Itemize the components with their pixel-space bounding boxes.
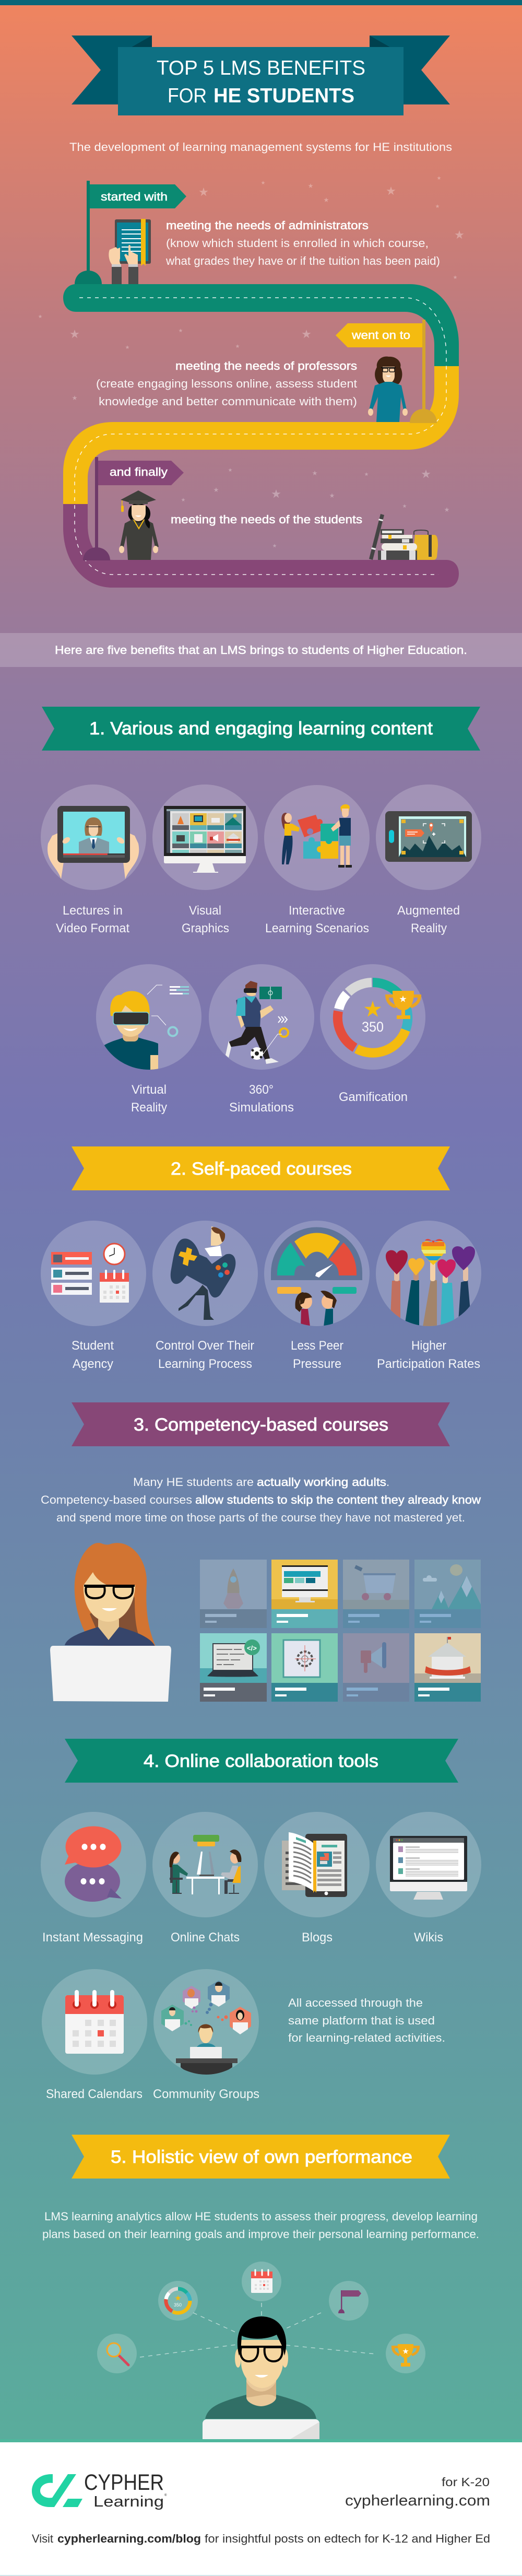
label: Pressure bbox=[293, 1357, 341, 1371]
panel: interactive learning scenarios bbox=[264, 785, 370, 935]
decorative stars bbox=[38, 176, 464, 547]
text: professors bbox=[96, 359, 357, 408]
logo mark bbox=[32, 2474, 82, 2507]
label: Wikis bbox=[414, 1930, 443, 1945]
panel: student agency bbox=[41, 1221, 146, 1371]
section 3 ribbon bbox=[72, 1402, 450, 1446]
illustration: student with glasses at laptop bbox=[203, 2316, 319, 2439]
label: Shared Calendars bbox=[46, 2087, 143, 2101]
footer blog link: cypherlearning.com/blog bbox=[57, 2532, 201, 2545]
tile: code laptop bbox=[200, 1633, 267, 1702]
flag: and finally bbox=[83, 457, 184, 560]
label: Augmented bbox=[397, 904, 460, 918]
section 4 ribbon: 4. Online collaboration tools bbox=[144, 1751, 378, 1771]
text: all accessed: All accessed through the bbox=[288, 1996, 423, 2009]
label: Student bbox=[72, 1339, 114, 1353]
panel: online chats bbox=[152, 1812, 258, 1945]
title text: TOP 5 LMS BENEFITS bbox=[157, 57, 365, 79]
title ribbon bbox=[72, 36, 450, 115]
logo wordmark bbox=[84, 2470, 167, 2510]
label: Virtual bbox=[132, 1083, 167, 1097]
subtitle: The development of learning management systems for HE institutions bbox=[69, 140, 452, 154]
text: all accessed: same platform that is used bbox=[288, 2014, 435, 2027]
tile: rocket bbox=[200, 1560, 267, 1628]
label: Visual bbox=[189, 904, 221, 918]
panel: blogs bbox=[264, 1812, 370, 1945]
icon: mini trophy bbox=[386, 2334, 425, 2373]
section 2 ribbon: 2. Self-paced courses bbox=[171, 1159, 352, 1179]
panel: visual graphics bbox=[152, 784, 258, 935]
tile: monitor bbox=[271, 1560, 338, 1628]
icon: cards, clock, calendar bbox=[51, 1244, 129, 1303]
road: green, yellow and purple segments bbox=[63, 284, 459, 588]
text: professors: (create engaging lessons online, assess student bbox=[96, 377, 357, 390]
footer strip bbox=[0, 2439, 522, 2442]
icon: VR headset person bbox=[103, 985, 189, 1070]
icon: gauge bbox=[271, 1227, 362, 1280]
label: Video Format bbox=[56, 921, 129, 935]
icon: tablet with hands bbox=[109, 219, 151, 284]
flag: started with bbox=[75, 181, 186, 284]
text: competency-based paragraph: . bbox=[386, 1476, 389, 1489]
panel: lectures in video format bbox=[41, 784, 146, 935]
label: Blogs bbox=[302, 1930, 333, 1945]
text: competency-based paragraph: allow students to skip the content they already know bbox=[195, 1493, 481, 1506]
text: analytics paragraph: LMS learning analytics allow HE students to assess their progress, develop learning bbox=[44, 2210, 478, 2223]
text: all accessed bbox=[288, 1996, 445, 2044]
panel: less peer pressure bbox=[264, 1221, 370, 1371]
course tile grid bbox=[200, 1560, 481, 1702]
label bbox=[56, 904, 129, 935]
footer panel bbox=[0, 2442, 522, 2576]
footer blog link bbox=[32, 2532, 490, 2545]
logo wordmark: CYPHER bbox=[84, 2470, 164, 2495]
text: analytics paragraph bbox=[42, 2210, 479, 2241]
icon: phone with AR view bbox=[385, 811, 472, 862]
logo wordmark: Learning bbox=[93, 2493, 164, 2510]
footer contact: cypherlearning.com bbox=[345, 2492, 490, 2509]
section 4 ribbon bbox=[65, 1739, 458, 1783]
panel: control over their learning process bbox=[152, 1221, 258, 1371]
flag: went on to: went on to bbox=[351, 329, 410, 342]
label: Less Peer bbox=[291, 1339, 343, 1353]
tile: university building bbox=[414, 1633, 481, 1702]
label: Reality bbox=[131, 1100, 167, 1115]
text: professors: knowledge and better communicate with them) bbox=[99, 395, 357, 408]
panel: higher participation rates bbox=[376, 1221, 481, 1371]
title text: FOR bbox=[168, 85, 207, 107]
section 5 ribbon bbox=[72, 2135, 450, 2179]
illustration: woman at laptop bbox=[50, 1543, 171, 1702]
section 1 ribbon: 1. Various and engaging learning content bbox=[89, 719, 433, 739]
icon: graduate bbox=[119, 490, 159, 560]
icon: monitor with tiles bbox=[164, 806, 246, 873]
label bbox=[229, 1083, 294, 1115]
icon: magnifier bbox=[97, 2334, 137, 2373]
section 2 ribbon bbox=[72, 1146, 450, 1190]
tile: cart bbox=[343, 1560, 409, 1628]
title text: HE STUDENTS bbox=[213, 85, 354, 107]
icon: tablet with open book bbox=[282, 1832, 347, 1897]
text: competency-based paragraph: Competency-based courses bbox=[41, 1493, 192, 1506]
label bbox=[131, 1083, 167, 1115]
icon: two people at desk bbox=[170, 1835, 241, 1894]
label bbox=[72, 1339, 114, 1371]
text: administrators: (know which student is enrolled in which course, bbox=[166, 237, 429, 250]
label: Interactive bbox=[289, 904, 345, 918]
icon: footballer with VR bbox=[226, 981, 288, 1064]
icon: score ring with trophy bbox=[338, 982, 408, 1053]
tile: blueprint gear bbox=[271, 1633, 338, 1702]
label: Control Over Their bbox=[156, 1339, 254, 1353]
panel: augmented reality bbox=[376, 784, 481, 935]
intro band: Here are five benefits that an LMS brings to students of Higher Education. bbox=[55, 643, 467, 657]
text: students: meeting the needs of the students bbox=[171, 513, 362, 526]
icon: people with puzzle bbox=[281, 804, 352, 868]
label: 360° bbox=[249, 1083, 274, 1097]
icon: mini calendar bbox=[242, 2262, 281, 2301]
label: Instant Messaging bbox=[42, 1930, 143, 1945]
panel: gamification bbox=[320, 964, 425, 1104]
icon: books and satchel bbox=[369, 514, 438, 560]
section 5 ribbon: 5. Holistic view of own performance bbox=[111, 2147, 412, 2167]
flag: started with: started with bbox=[101, 190, 168, 203]
icon: mini score ring: 350 bbox=[174, 2302, 182, 2308]
text: administrators: meeting the needs of administrators bbox=[166, 219, 369, 232]
label: Learning Scenarios bbox=[265, 921, 369, 935]
text: all accessed: for learning-related activities. bbox=[288, 2031, 445, 2044]
text: administrators bbox=[165, 219, 440, 267]
panel: 360 simulations bbox=[209, 964, 314, 1115]
top bar bbox=[0, 0, 522, 5]
icon: chat bubbles bbox=[65, 1826, 122, 1902]
logo wordmark: ® bbox=[164, 2493, 167, 2497]
icon: two students talking bbox=[277, 1287, 357, 1327]
label: Lectures in bbox=[63, 904, 123, 918]
intro band bbox=[0, 633, 522, 667]
text: analytics paragraph: plans based on their learning goals and improve their personal learning performance. bbox=[42, 2228, 479, 2241]
text: competency-based paragraph bbox=[41, 1476, 481, 1524]
label: Online Chats bbox=[171, 1930, 240, 1945]
label bbox=[377, 1339, 480, 1371]
footer blog link: Visit bbox=[32, 2532, 53, 2545]
label bbox=[156, 1339, 254, 1371]
flag: went on to bbox=[336, 320, 437, 423]
tile: code laptop: </> bbox=[247, 1644, 257, 1652]
icon: mini flag bbox=[329, 2281, 369, 2321]
label: Community Groups bbox=[153, 2087, 259, 2101]
label: Higher bbox=[411, 1339, 446, 1353]
label bbox=[291, 1339, 343, 1371]
section 1 ribbon bbox=[42, 707, 480, 751]
footer contact bbox=[345, 2475, 490, 2509]
panel: virtual reality bbox=[96, 964, 201, 1115]
panel: shared calendars bbox=[42, 1969, 147, 2101]
icon: raised arms with hearts bbox=[386, 1239, 475, 1327]
flag: and finally: and finally bbox=[110, 465, 168, 478]
label: Graphics bbox=[182, 921, 229, 935]
icon: man carrying game controller bbox=[171, 1226, 235, 1320]
footer blog link: for insightful posts on edtech for K-12 and Higher Ed bbox=[205, 2532, 490, 2545]
label: Agency bbox=[73, 1357, 113, 1371]
label: Participation Rates bbox=[377, 1357, 480, 1371]
icon: star and score bbox=[362, 1001, 384, 1035]
dashed connectors bbox=[140, 2303, 376, 2357]
label bbox=[182, 904, 229, 935]
text: administrators: what grades they have or if the tuition has been paid) bbox=[165, 254, 440, 267]
icon: star and score: 350 bbox=[362, 1019, 384, 1035]
label bbox=[265, 904, 369, 935]
label: Gamification bbox=[339, 1090, 408, 1104]
label: Simulations bbox=[229, 1100, 294, 1115]
icon: calendar bbox=[65, 1992, 124, 2054]
icon: trophy bbox=[385, 991, 421, 1019]
section 3 ribbon: 3. Competency-based courses bbox=[134, 1415, 388, 1435]
icon: professor bbox=[368, 357, 408, 422]
text: competency-based paragraph: Many HE students are bbox=[133, 1476, 254, 1489]
label bbox=[397, 904, 460, 935]
text: professors: meeting the needs of professors bbox=[175, 359, 357, 372]
panel: wikis bbox=[376, 1812, 481, 1945]
icon: hands holding tablet bbox=[48, 806, 139, 879]
panel: instant messaging bbox=[41, 1812, 146, 1945]
tile: mountains bbox=[414, 1560, 481, 1628]
tile: megaphone bbox=[343, 1633, 409, 1702]
panel: community groups bbox=[153, 1969, 259, 2101]
title text bbox=[157, 57, 365, 107]
label: Learning Process bbox=[158, 1357, 252, 1371]
text: competency-based paragraph: actually working adults bbox=[257, 1476, 386, 1489]
text: competency-based paragraph: and spend more time on those parts of the course they have not mastered yet. bbox=[56, 1511, 465, 1524]
label: Reality bbox=[411, 921, 447, 935]
footer contact: for K-20 bbox=[442, 2475, 490, 2489]
icon: mini score ring bbox=[158, 2281, 198, 2321]
icon: monitor with wiki bbox=[390, 1836, 467, 1900]
icon: person with peer avatars bbox=[161, 1981, 251, 2076]
